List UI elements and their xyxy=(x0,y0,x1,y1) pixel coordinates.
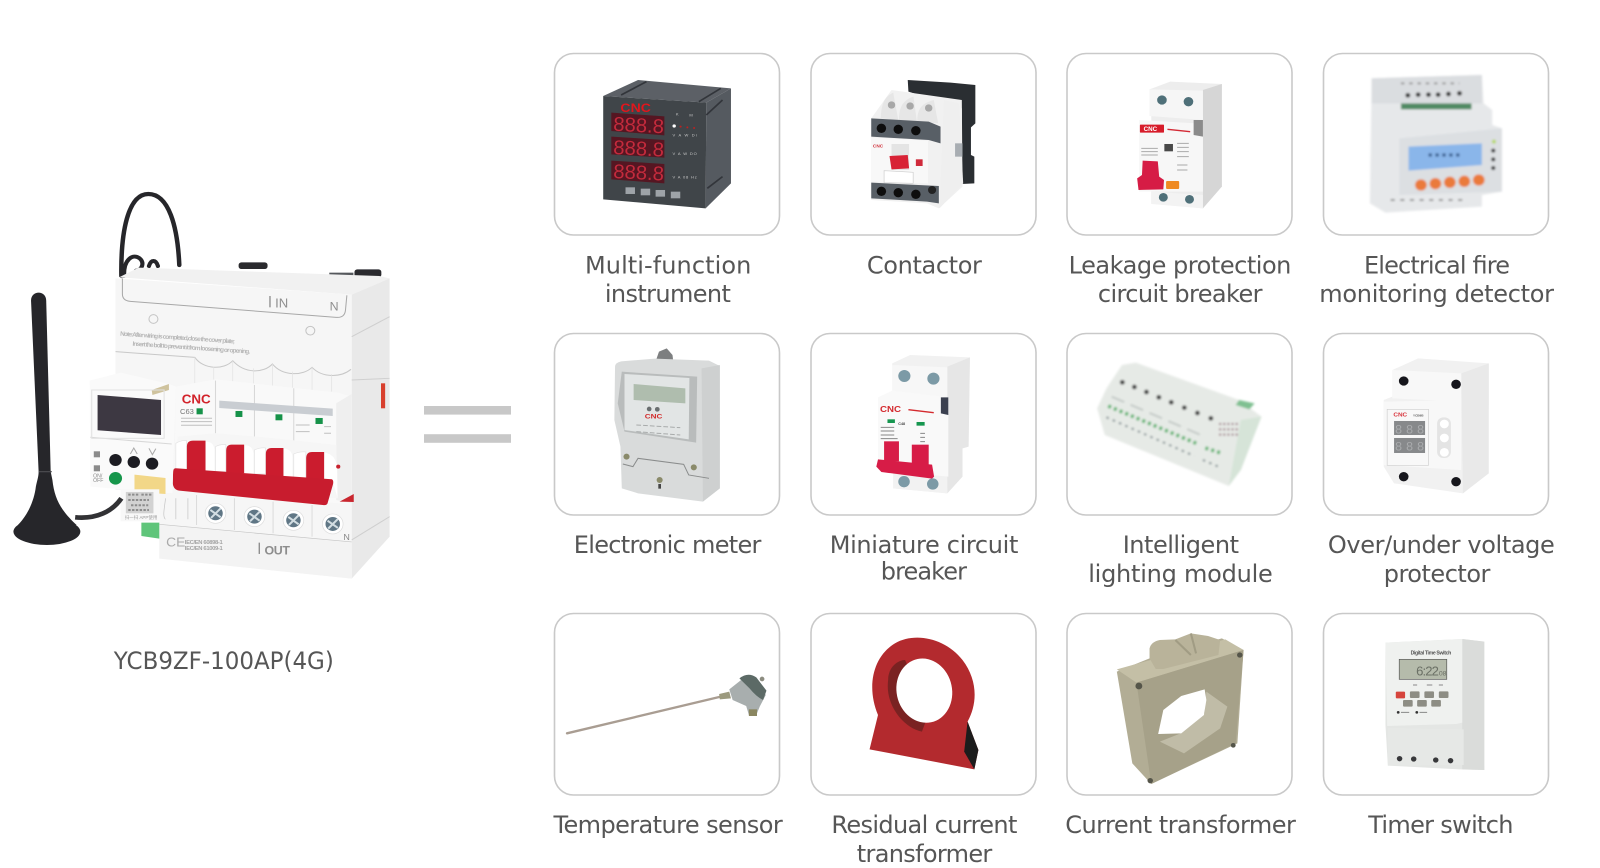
card frame xyxy=(1324,334,1548,515)
icon: miniature circuit breaker xyxy=(876,355,970,493)
icon: temperature probe xyxy=(567,675,766,733)
caption: protector xyxy=(1384,560,1491,588)
icon: voltage protector: YCB9B xyxy=(1413,414,1424,418)
caption xyxy=(831,811,1017,868)
icon: panel meter: V A W Di xyxy=(672,133,697,138)
green terminal xyxy=(141,523,159,539)
icon: digital timer: 08 xyxy=(1439,670,1447,677)
caption: Intelligent xyxy=(1123,531,1239,559)
icon: voltage protector: 888 xyxy=(1395,440,1424,454)
panel: Intelligent lighting module xyxy=(1067,334,1292,588)
icon: panel meter: V A W DO xyxy=(672,151,697,156)
caption xyxy=(585,252,751,308)
icon: RCBO breaker xyxy=(1137,82,1222,208)
icon: antenna with magnetic base xyxy=(13,293,121,545)
panel: Current transformer xyxy=(1065,614,1296,839)
breaker housing xyxy=(116,268,390,579)
icon: miniature circuit breaker: C48 xyxy=(898,422,905,426)
caption xyxy=(1328,531,1555,588)
icon: digital timer: Digital Time Switch xyxy=(1411,651,1451,657)
icon: contactor xyxy=(871,80,975,208)
caption xyxy=(1319,252,1554,308)
printed labels on cover: Insert the bolt to prevent it from loosening or opening. xyxy=(132,341,251,356)
breaker poles module: CNC xyxy=(182,392,211,406)
buttons xyxy=(93,448,158,485)
printed labels on cover xyxy=(120,296,339,356)
card frame xyxy=(1067,614,1292,795)
caption: Electronic meter xyxy=(574,531,762,559)
icon: red toggles and bar xyxy=(876,441,934,479)
caption xyxy=(1088,531,1273,588)
caption: Temperature sensor xyxy=(552,811,783,839)
bottom terminal cover with OUT label: CE xyxy=(166,535,185,550)
equals sign xyxy=(424,406,511,443)
icon: voltage protector: CNC xyxy=(1393,413,1407,419)
caption: Current transformer xyxy=(1065,811,1296,839)
caption xyxy=(830,531,1018,586)
panel: Leakage protection circuit breaker xyxy=(1067,54,1292,308)
display and control module xyxy=(90,373,188,539)
card frame xyxy=(811,54,1036,235)
bottom terminal cover with OUT label xyxy=(159,524,352,579)
panel: Multi-function instrument xyxy=(554,54,780,308)
icon: panel meter xyxy=(603,80,731,208)
icon: panel meter: K xyxy=(676,111,679,116)
icon: panel meter: 888.8 xyxy=(613,161,665,186)
caption: circuit breaker xyxy=(1098,280,1263,308)
QR code and app label: 扫一扫 APP使用 xyxy=(125,514,157,521)
card frame xyxy=(1067,334,1292,515)
QR code and app label xyxy=(121,489,159,521)
caption: Multi-function xyxy=(585,252,751,280)
buttons: OFF xyxy=(93,478,103,484)
caption: Miniature circuit xyxy=(830,531,1018,559)
card frame xyxy=(1324,614,1548,795)
bottom terminal cover with OUT label: OUT xyxy=(264,544,291,558)
breaker poles module: N xyxy=(343,532,350,542)
icon: panel meter: M xyxy=(689,113,693,118)
icon: voltage protector: 888 xyxy=(1395,423,1424,436)
bottom terminal cover with OUT label: IEC/EN 60898-1 xyxy=(185,540,224,546)
display screen xyxy=(98,395,161,435)
caption: instrument xyxy=(605,280,731,308)
caption: Leakage protection xyxy=(1069,252,1291,280)
icon: red toggle levers and bar xyxy=(173,433,338,505)
yellow label xyxy=(134,475,166,494)
panel: Electrical fire monitoring detector xyxy=(1319,54,1554,308)
icon: terminal screws xyxy=(205,503,343,534)
icon: fire monitoring detector xyxy=(1370,75,1502,213)
icon: electronic meter: CNC xyxy=(645,414,663,421)
card frame xyxy=(554,54,780,235)
icon: top terminal clips xyxy=(239,262,381,277)
panel: Electronic meter xyxy=(554,334,780,559)
breaker poles module xyxy=(173,379,354,542)
caption: Over/under voltage xyxy=(1328,531,1555,559)
icon: electronic meter xyxy=(614,348,720,502)
main product: smart circuit breaker with antenna xyxy=(13,194,390,579)
caption xyxy=(1069,252,1291,308)
icon: digital timer xyxy=(1385,639,1484,770)
caption: Contactor xyxy=(867,252,982,280)
card frame xyxy=(811,614,1036,795)
panel: Miniature circuit breaker xyxy=(811,334,1036,586)
icon: voltage protector xyxy=(1384,358,1489,493)
caption: Residual current xyxy=(831,811,1017,839)
card frame xyxy=(554,614,780,795)
printed labels on cover: IN xyxy=(275,296,288,310)
panel: Over/under voltage protector xyxy=(1324,334,1555,588)
product label: YCB9ZF-100AP(4G) xyxy=(113,647,334,675)
icon: contactor: CNC xyxy=(873,143,884,148)
icon: current transformer xyxy=(1117,633,1244,784)
panel: Contactor xyxy=(811,54,1036,280)
card frame xyxy=(1324,54,1548,235)
caption: Electrical fire xyxy=(1364,252,1510,280)
icon: panel meter: V A 08 Hz xyxy=(672,174,697,179)
caption: monitoring detector xyxy=(1319,280,1554,308)
printed labels on cover: Note:After wiring is completed,close the cover plate; xyxy=(120,331,235,345)
panel: Timer switch xyxy=(1324,614,1548,839)
caption: lighting module xyxy=(1088,560,1273,588)
icon: lighting module xyxy=(1097,363,1261,486)
breaker poles module: C63 xyxy=(180,407,194,416)
icon: miniature circuit breaker: CNC xyxy=(880,405,901,414)
caption: Timer switch xyxy=(1367,811,1514,839)
card frame xyxy=(554,334,780,515)
panel: Residual current transformer xyxy=(811,614,1036,868)
panel: Temperature sensor xyxy=(552,614,783,839)
icon: panel meter: CNC xyxy=(620,101,651,115)
icon: residual current transformer xyxy=(870,638,978,769)
icon: panel meter: 888.8 xyxy=(613,137,665,162)
buttons: ON/ xyxy=(93,473,103,479)
top terminal arcs xyxy=(881,93,938,123)
icon: panel meter: 888.8 xyxy=(613,114,665,138)
card frame xyxy=(811,334,1036,515)
caption: transformer xyxy=(857,840,992,868)
icon: antenna cable loop xyxy=(121,194,179,276)
icon: RCBO breaker: CNC xyxy=(1144,126,1158,133)
card frame xyxy=(1067,54,1292,235)
bottom terminal cover with OUT label: IEC/EN 61009-1 xyxy=(185,546,224,552)
caption: breaker xyxy=(881,558,967,586)
printed labels on cover: N xyxy=(330,300,339,314)
icon: digital timer: 6:22 xyxy=(1416,664,1439,678)
